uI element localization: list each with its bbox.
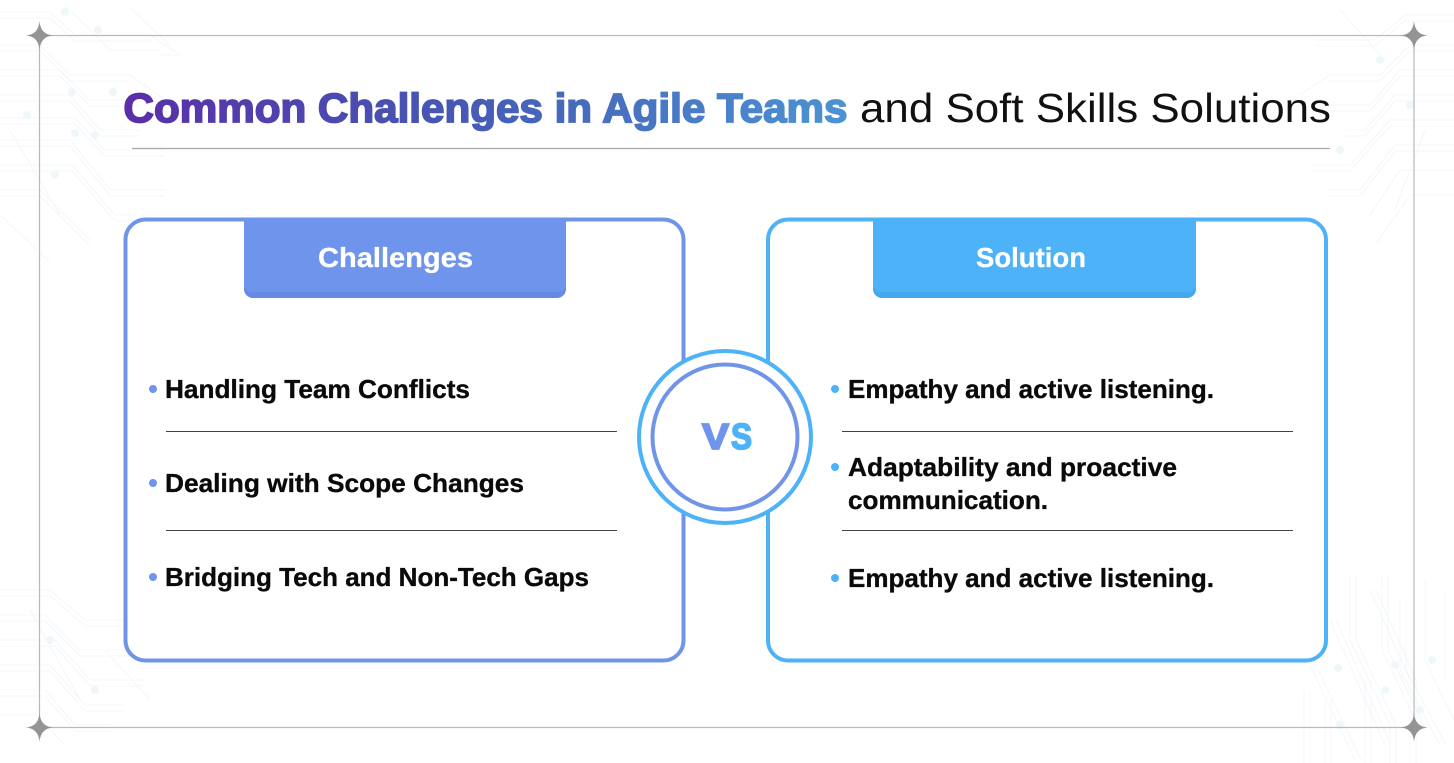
challenges header tab [244,218,566,298]
icon: corner star top left [26,21,53,50]
challenge item: scope changes: Dealing with Scope Changes [165,468,524,498]
solution item: adaptability: Adaptability and proactive [848,452,1177,482]
solution item: listening: Empathy and active listening. [848,563,1214,593]
challenges header tab: Challenges [318,242,473,273]
vs badge [639,351,811,523]
icon: corner star bottom right [1400,713,1428,742]
vs badge: S [731,416,752,457]
panel: solution [768,218,1326,660]
vs badge: V [702,416,729,457]
challenge item: tech gaps: Bridging Tech and Non-Tech Gaps [165,562,589,592]
challenge item: team conflicts: Handling Team Conflicts [165,374,470,404]
title [124,85,1331,131]
title: Common Challenges in Agile Teams [124,85,848,131]
panel: challenges [126,218,684,660]
solution header tab: Solution [976,242,1086,273]
icon: corner star bottom left [26,713,53,742]
solution item: adaptability [831,452,1177,515]
solution item: empathy: Empathy and active listening. [848,374,1214,404]
solution item: adaptability: communication. [848,485,1048,515]
title: and Soft Skills Solutions [860,85,1331,131]
icon: corner star top right [1400,21,1428,50]
solution header tab [873,218,1196,298]
